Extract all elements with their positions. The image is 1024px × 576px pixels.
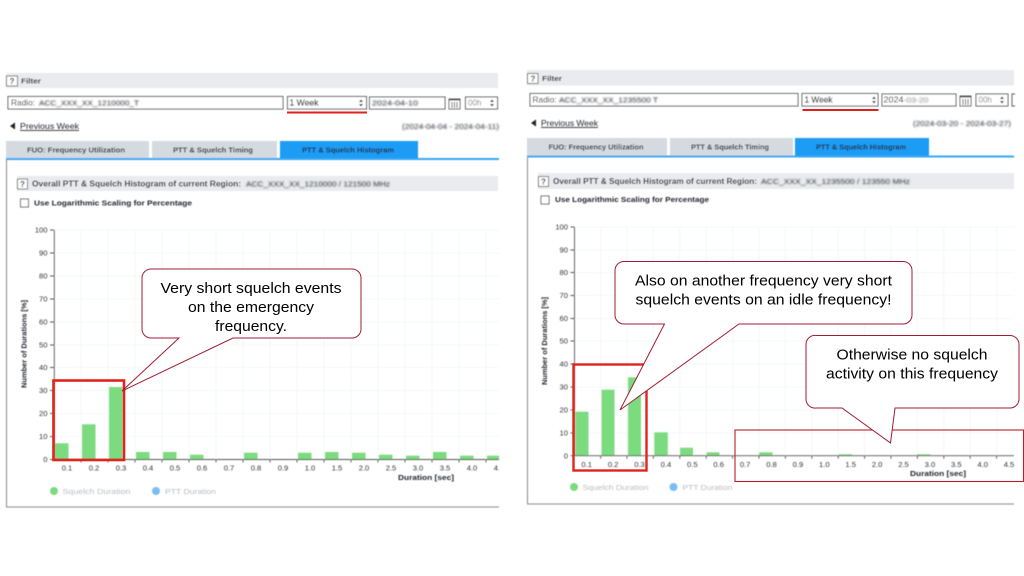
week selector underline — [287, 112, 367, 114]
highlight box: first three bars — [54, 380, 124, 460]
tabs: FUO: Frequency Utilization — [548, 142, 644, 152]
highlight box: first three bars — [574, 364, 646, 470]
x axis labels: 0.2 — [608, 460, 618, 469]
legend: PTT Duration — [165, 487, 216, 496]
radio input: ACC_XXX_XX_1210000_T — [39, 98, 139, 108]
x axis labels: 0.7 — [740, 460, 750, 469]
y axis labels: 70 — [560, 291, 568, 300]
axes — [570, 227, 1014, 459]
x axis labels: 1.5 — [332, 464, 342, 472]
clipped extra control — [1012, 94, 1015, 106]
y axis title: Number of Durations [%] — [20, 299, 28, 388]
x axis labels: 0.2 — [89, 464, 99, 472]
y axis labels: 80 — [39, 272, 48, 281]
y axis labels: 90 — [560, 246, 568, 255]
axes — [50, 230, 499, 462]
filter header bar — [6, 73, 498, 88]
histogram section header: ? — [20, 180, 25, 189]
radio input — [8, 96, 283, 109]
x axis labels: 0.1 — [581, 460, 592, 469]
x axis labels: 4.0 — [977, 460, 988, 469]
bar chart: left histogram — [35, 226, 504, 482]
tabs: PTT & Squelch Timing — [173, 146, 253, 154]
x axis labels: 2.0 — [359, 464, 369, 472]
x axis labels: 0.4 — [143, 464, 153, 472]
callout: emergency frequency: Very short squelch events — [160, 280, 342, 297]
y axis labels: 80 — [560, 268, 568, 277]
x axis labels: 3.5 — [951, 460, 962, 469]
y axis labels: 30 — [39, 386, 48, 395]
y axis labels: 10 — [560, 429, 568, 438]
x axis labels: 0.6 — [197, 464, 207, 472]
x axis labels: 3.5 — [440, 464, 450, 472]
filter header bar: ? — [10, 77, 15, 86]
y axis labels: 50 — [560, 337, 568, 346]
tabs — [527, 138, 929, 156]
week selector underline — [802, 109, 878, 111]
histogram section header: ? — [541, 178, 546, 186]
highlight box: idle durations — [735, 430, 1024, 482]
x axis labels: 0.4 — [661, 460, 671, 469]
y axis labels: 60 — [560, 314, 568, 323]
y axis labels: 70 — [39, 295, 48, 304]
x axis title: Duration [sec] — [910, 469, 967, 478]
x axis labels: 0.3 — [116, 464, 126, 472]
callout: no other activity: activity on this frequency — [826, 366, 999, 382]
x axis labels: 1.0 — [819, 460, 830, 469]
tabs — [6, 141, 418, 159]
callout: another frequency: squelch events on an idle frequency! — [636, 292, 892, 308]
x axis labels: 2.0 — [872, 460, 882, 469]
hour selector — [466, 97, 498, 109]
panel: right histogram screenshot — [527, 70, 1024, 504]
date input: 2024 — [884, 94, 904, 104]
date input — [882, 94, 956, 106]
squelch bars — [576, 377, 930, 456]
x axis labels: 2.5 — [386, 464, 396, 472]
x axis labels — [61, 464, 500, 472]
y axis labels: 50 — [39, 341, 48, 350]
date input: -03-20 — [904, 96, 928, 104]
y axis labels: 0 — [43, 455, 48, 464]
panel frame — [6, 159, 499, 507]
y axis labels: 40 — [560, 360, 568, 369]
callout: emergency frequency — [122, 269, 361, 391]
callout: emergency frequency: frequency. — [215, 318, 287, 335]
legend — [570, 483, 732, 492]
panel frame — [528, 156, 1014, 504]
histogram section header: Overall PTT & Squelch Histogram of current Region: — [553, 177, 757, 186]
legend: Squelch Duration — [582, 483, 648, 492]
x axis title: Duration [sec] — [398, 473, 455, 482]
callout: emergency frequency: on the emergency — [188, 299, 315, 316]
week selector — [288, 96, 366, 109]
radio input — [530, 94, 798, 106]
squelch bars — [55, 387, 500, 459]
filter header bar: Filter — [542, 74, 562, 83]
hour selector — [976, 94, 1008, 106]
x axis labels: 1.5 — [845, 460, 856, 469]
histogram section header: ACC_XXX_XX_1210000 / 121500 MHz — [246, 180, 390, 188]
callout: another frequency — [615, 262, 912, 410]
x axis labels: 0.6 — [713, 460, 724, 469]
bar chart: right histogram — [555, 223, 1014, 478]
x axis labels: 2.5 — [898, 460, 909, 469]
y axis labels: 100 — [555, 223, 568, 232]
y axis title: Number of Durations [%] — [540, 296, 549, 385]
y axis labels: 100 — [35, 226, 48, 235]
y axis labels: 60 — [39, 318, 48, 327]
legend: Squelch Duration — [62, 487, 130, 496]
filter header bar: Filter — [21, 76, 41, 86]
tabs: FUO: Frequency Utilization — [27, 146, 125, 154]
histogram section header — [538, 173, 1014, 189]
callout: no other activity: Otherwise no squelch — [836, 346, 988, 364]
icon: calendar — [449, 98, 460, 109]
logarithmic scaling checkbox: Use Logarithmic Scaling for Percentage — [555, 195, 709, 204]
y axis labels — [35, 226, 48, 464]
y axis labels: 40 — [39, 363, 48, 372]
y axis labels: 30 — [560, 383, 568, 392]
y axis labels: 20 — [39, 409, 48, 418]
x axis labels — [581, 460, 1014, 469]
tabs: PTT & Squelch Histogram — [816, 142, 906, 152]
radio input: Radio: — [11, 98, 35, 108]
x axis labels: 0.5 — [687, 460, 698, 469]
x axis labels: 0.1 — [62, 464, 72, 472]
hour selector: 00h — [978, 96, 992, 104]
x axis labels: 0.5 — [170, 464, 180, 472]
radio input: Radio: — [532, 94, 556, 104]
x axis labels: 0.9 — [278, 464, 288, 472]
filter header bar: ? — [531, 74, 536, 84]
y axis labels: 10 — [39, 432, 48, 441]
date range: (2024-04-04 - 2024-04-11) — [402, 122, 500, 131]
histogram section header: ACC_XXX_XX_1235500 / 123550 MHz — [761, 177, 910, 186]
y axis labels — [555, 223, 568, 460]
x axis labels: 3.0 — [413, 464, 423, 472]
x axis labels: 4.5 — [494, 464, 504, 472]
hour selector: 00h — [468, 98, 481, 108]
week selector — [802, 94, 878, 106]
histogram section header: Overall PTT & Squelch Histogram of current Region: — [32, 180, 241, 188]
y axis labels: 20 — [560, 406, 568, 415]
callout: no other activity — [806, 335, 1019, 443]
x axis labels: 0.8 — [251, 464, 261, 472]
panel: left histogram screenshot — [6, 73, 504, 507]
previous week link: Previous Week — [541, 118, 599, 128]
tabs: PTT & Squelch Histogram — [302, 146, 394, 154]
x axis labels: 4.0 — [467, 464, 477, 472]
week selector: 1 Week — [290, 98, 319, 108]
filter header bar — [527, 70, 1014, 86]
date input: 2024-04-10 — [372, 98, 418, 108]
x axis labels: 0.9 — [793, 460, 803, 469]
y axis labels: 90 — [39, 249, 48, 258]
y axis labels: 0 — [564, 451, 568, 460]
histogram section header — [17, 176, 498, 191]
x axis labels: 0.8 — [766, 460, 777, 469]
legend: PTT Duration — [682, 483, 732, 492]
x axis labels: 4.5 — [1004, 460, 1014, 469]
callout: another frequency: Also on another frequency very short — [635, 272, 893, 290]
x axis labels: 0.3 — [634, 460, 645, 469]
previous week link: Previous Week — [20, 121, 80, 131]
x axis labels: 3.0 — [925, 460, 935, 469]
logarithmic scaling checkbox: Use Logarithmic Scaling for Percentage — [34, 198, 192, 208]
x axis labels: 1.0 — [305, 464, 315, 472]
icon: calendar — [960, 96, 971, 106]
radio input: ACC_XXX_XX_1235500 T — [559, 96, 658, 104]
date input — [370, 97, 445, 109]
date range: (2024-03-20 - 2024-03-27) — [913, 119, 1012, 128]
week selector: 1 Week — [804, 94, 833, 104]
legend — [50, 487, 216, 496]
tabs: PTT & Squelch Timing — [691, 142, 769, 152]
x axis labels: 0.7 — [224, 464, 234, 472]
